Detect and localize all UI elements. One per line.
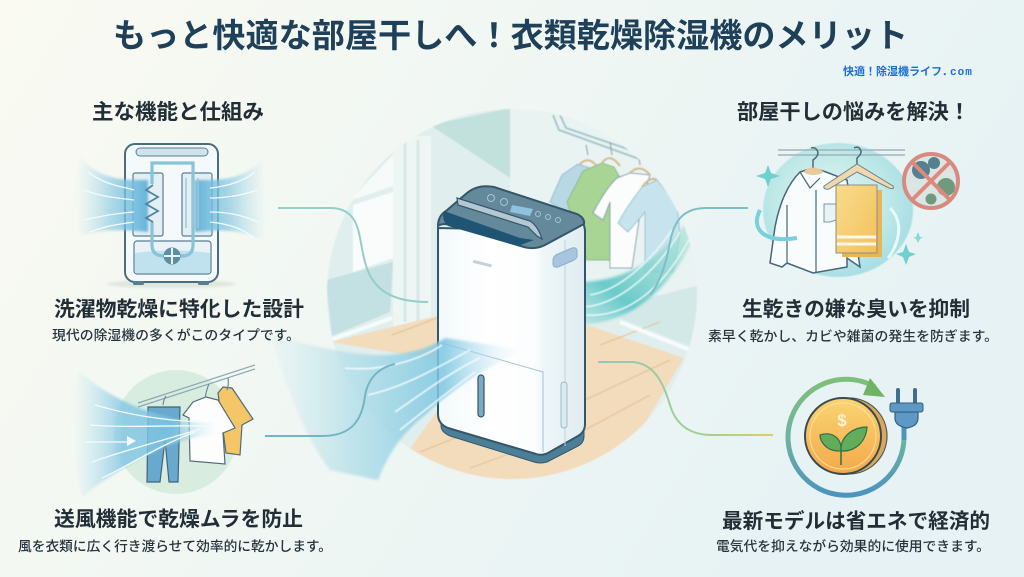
text: smell: 素早く乾かし、カビや雑菌の発生を防ぎます。 bbox=[708, 329, 998, 344]
site credit: com bbox=[950, 67, 973, 79]
logo bbox=[473, 260, 492, 267]
text: fan: 風を衣類に広く行き渡らせて効率的に乾かします。 bbox=[18, 539, 332, 554]
text: smell bbox=[708, 298, 998, 344]
text: smell: 生乾きの嫌な臭いを抑制 bbox=[742, 298, 970, 321]
text: fan: 送風機能で乾燥ムラを防止 bbox=[54, 508, 303, 531]
heading: functions: 主な機能と仕組み bbox=[92, 101, 264, 124]
icon: dehumidifier mechanism bbox=[76, 144, 266, 288]
right air flow bbox=[586, 226, 690, 326]
icon: coin, plant, plug bbox=[788, 378, 923, 495]
text: economy: 電気代を抑えながら効果的に使用できます。 bbox=[716, 538, 990, 554]
louver bbox=[457, 198, 542, 239]
control icons bbox=[488, 194, 560, 222]
center scene: room circle bbox=[326, 105, 700, 490]
text: economy: 最新モデルは省エネで経済的 bbox=[722, 509, 990, 533]
icon: shirt and towel with no mold bbox=[756, 143, 958, 277]
title: もっと快適な部屋干しへ！衣類乾燥除湿機のメリット bbox=[113, 17, 908, 54]
dehumidifier bbox=[438, 186, 585, 463]
connector: top-right bbox=[650, 208, 748, 295]
connector: top-left bbox=[278, 208, 428, 302]
base bbox=[441, 418, 584, 463]
text: design bbox=[52, 298, 305, 343]
connector: bottom-right bbox=[598, 362, 773, 435]
water window bbox=[478, 375, 484, 417]
air outlet bbox=[443, 211, 534, 246]
side handle bbox=[553, 248, 577, 267]
text: design: 現代の除湿機の多くがこのタイプです。 bbox=[52, 327, 300, 343]
body bbox=[438, 218, 585, 455]
connector: bottom-left bbox=[265, 364, 395, 436]
text: fan bbox=[18, 508, 332, 554]
icon: coin, plant, plug: $ bbox=[837, 411, 847, 430]
display bbox=[510, 205, 533, 216]
heading: solving problems: 部屋干しの悩みを解決！ bbox=[737, 101, 970, 124]
side window bbox=[561, 382, 567, 428]
top panel bbox=[438, 186, 584, 248]
text: design: 洗濯物乾燥に特化した設計 bbox=[54, 298, 305, 321]
hanging clothes bbox=[549, 163, 590, 210]
site credit: 快適！除湿機ライフ． bbox=[843, 66, 953, 78]
text: economy bbox=[716, 509, 990, 554]
left air flow bbox=[270, 335, 525, 480]
icon: prohibited mold bbox=[904, 154, 958, 208]
icon: fan blowing clothes bbox=[73, 365, 255, 497]
